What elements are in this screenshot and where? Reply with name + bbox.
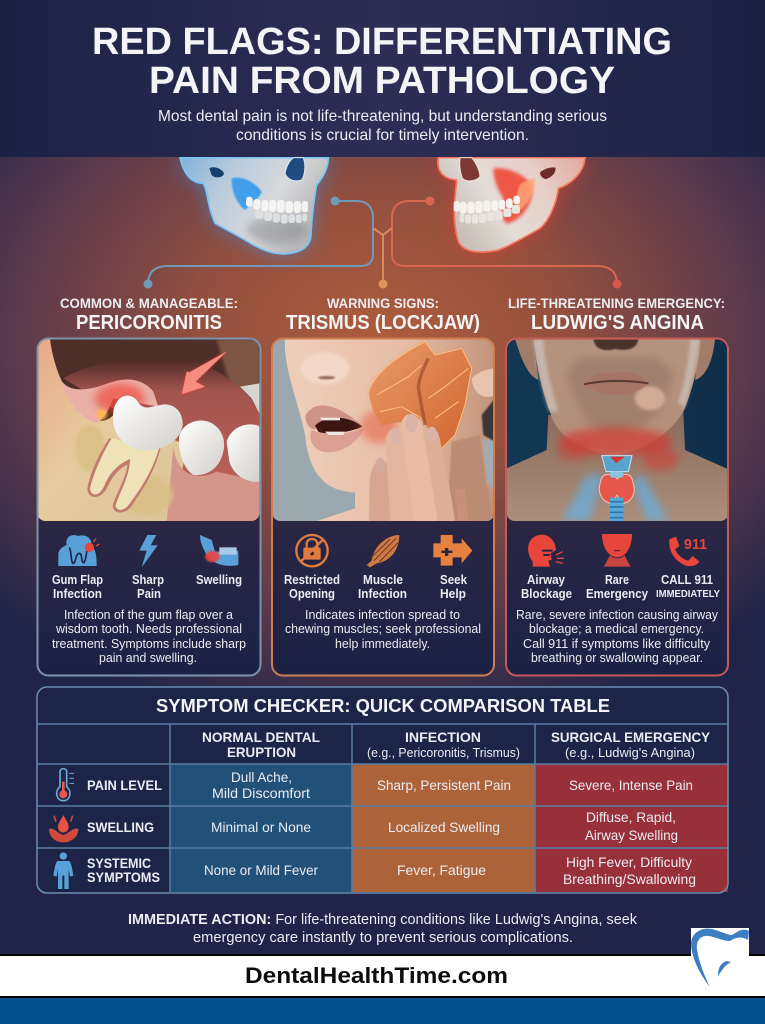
row: systemic symptoms: SYMPTOMS: [87, 870, 160, 885]
icon labels: CALL 911: [661, 573, 713, 587]
icon: airway blockage: [528, 535, 564, 567]
subtitle: [158, 108, 607, 144]
icon labels: Airway: [527, 573, 565, 587]
description: treatment. Symptoms include sharp: [52, 636, 246, 651]
comparison table: [37, 687, 728, 893]
icon labels: Seek: [440, 573, 467, 587]
description: Call 911 if symptoms like difficulty: [523, 636, 710, 651]
icon labels: Infection: [358, 587, 407, 601]
illustration: impacted wisdom tooth: [37, 339, 262, 522]
icon: seek help arrow: [433, 535, 472, 566]
icon labels: Rare: [605, 573, 629, 587]
icon labels: [52, 573, 242, 601]
immediate action note: [128, 912, 638, 946]
row: swelling: Minimal or None: [211, 819, 311, 835]
icon: lightning bolt: [139, 535, 158, 567]
description: Rare, severe infection causing airway: [516, 607, 718, 622]
icon labels: [521, 573, 720, 601]
row: systemic symptoms: None or Mild Fever: [204, 862, 318, 878]
heading: trismus: WARNING SIGNS:: [327, 295, 439, 311]
icon labels: Restricted: [284, 573, 340, 587]
description: help immediately.: [335, 636, 430, 651]
illustration: blue skull: [180, 158, 328, 254]
heading: ludwig's angina: LIFE-THREATENING EMERGENCY:: [508, 295, 725, 311]
icon labels: Muscle: [363, 573, 403, 587]
icon labels: Pain: [137, 587, 161, 601]
column headers: (e.g., Ludwig's Angina): [565, 745, 695, 760]
icon labels: Opening: [289, 587, 335, 601]
title: PAIN FROM PATHOLOGY: [149, 60, 615, 102]
icon: person: [53, 852, 73, 889]
description: breathing or swallowing appear.: [531, 650, 703, 665]
description: [285, 607, 481, 651]
icon: swelling drop: [49, 815, 78, 842]
description: Indicates infection spread to: [305, 607, 460, 622]
icon labels: Help: [440, 587, 466, 601]
row: systemic symptoms: Fever, Fatigue: [397, 862, 486, 878]
column headers: ERUPTION: [227, 744, 296, 760]
row: systemic symptoms: Breathing/Swallowing: [563, 871, 696, 887]
header band: [0, 0, 765, 157]
immediate action note: emergency care instantly to prevent serious complications.: [193, 930, 573, 946]
icon labels: [284, 573, 467, 601]
column headers: [202, 729, 711, 760]
column headers: SURGICAL EMERGENCY: [551, 729, 711, 745]
row: pain level: [87, 769, 693, 801]
icon labels: Emergency: [586, 587, 648, 601]
description: blockage; a medical emergency.: [529, 621, 704, 636]
connector lines: [144, 196, 622, 288]
description: chewing muscles; seek professional: [285, 621, 481, 636]
icon labels: Infection: [53, 587, 102, 601]
row: pain level: Severe, Intense Pain: [569, 777, 693, 793]
row: swelling: [87, 809, 678, 843]
heading: pericoronitis: COMMON & MANAGEABLE:: [60, 295, 238, 311]
illustration: red skull: [438, 158, 585, 252]
icon: swollen jaw: [200, 535, 238, 566]
row: swelling: Diffuse, Rapid,: [586, 809, 676, 825]
heading: ludwig's angina: [508, 295, 725, 334]
row: systemic symptoms: SYSTEMIC: [87, 856, 151, 871]
row: swelling: Airway Swelling: [585, 827, 678, 843]
icon labels: IMMEDIATELY: [656, 589, 720, 600]
row: pain level: Sharp, Persistent Pain: [377, 777, 511, 793]
heading: trismus: TRISMUS (LOCKJAW): [286, 312, 480, 334]
title: [92, 21, 672, 102]
row: swelling: Localized Swelling: [388, 819, 500, 835]
icon: phone 911: [669, 536, 707, 566]
icon: gum flap tooth: [58, 535, 99, 566]
icon: locked jaw: [296, 535, 328, 566]
row: pain level: Mild Discomfort: [212, 785, 310, 801]
logo: tooth: [691, 928, 749, 987]
column headers: NORMAL DENTAL: [202, 729, 320, 745]
icon labels: Blockage: [521, 587, 572, 601]
subtitle: Most dental pain is not life-threatening, but understanding serious: [158, 108, 607, 125]
row: pain level: Dull Ache,: [231, 769, 292, 785]
panel: ludwig's angina: [506, 338, 730, 676]
icon labels: Swelling: [196, 573, 242, 587]
illustration: woman holding jaw: [272, 339, 495, 522]
column headers: INFECTION: [405, 729, 481, 745]
icon labels: Sharp: [132, 573, 164, 587]
row: systemic symptoms: [87, 854, 696, 887]
icon: phone 911: 911: [684, 536, 707, 553]
footer band: [0, 954, 765, 1024]
description: pain and swelling.: [99, 650, 197, 665]
table title: SYMPTOM CHECKER: QUICK COMPARISON TABLE: [156, 696, 610, 716]
title: RED FLAGS: DIFFERENTIATING: [92, 21, 672, 63]
panel: pericoronitis: [37, 338, 262, 676]
description: wisdom tooth. Needs professional: [55, 621, 242, 636]
column headers: (e.g., Pericoronitis, Trismus): [367, 745, 520, 760]
description: [52, 607, 246, 665]
immediate action note: IMMEDIATE ACTION: For life-threatening conditions like Ludwig's Angina, seek: [128, 912, 638, 928]
heading: pericoronitis: [60, 295, 238, 334]
description: Infection of the gum flap over a: [64, 607, 234, 622]
footer website: DentalHealthTime.com: [245, 963, 508, 988]
row: systemic symptoms: High Fever, Difficulty: [566, 854, 692, 870]
heading: pericoronitis: PERICORONITIS: [76, 312, 222, 334]
row: pain level: PAIN LEVEL: [87, 778, 162, 793]
panel: trismus: [272, 338, 495, 676]
icon: thermometer: [57, 769, 74, 801]
icon: rare emergency face: [602, 534, 632, 567]
heading: ludwig's angina: LUDWIG'S ANGINA: [531, 312, 704, 334]
row: swelling: SWELLING: [87, 820, 154, 835]
icon labels: Gum Flap: [52, 573, 103, 587]
icon: muscle: [367, 535, 399, 567]
description: [516, 607, 718, 665]
illustration: swollen neck: [507, 339, 730, 522]
heading: trismus: [286, 295, 480, 334]
subtitle: conditions is crucial for timely intervention.: [236, 127, 529, 144]
